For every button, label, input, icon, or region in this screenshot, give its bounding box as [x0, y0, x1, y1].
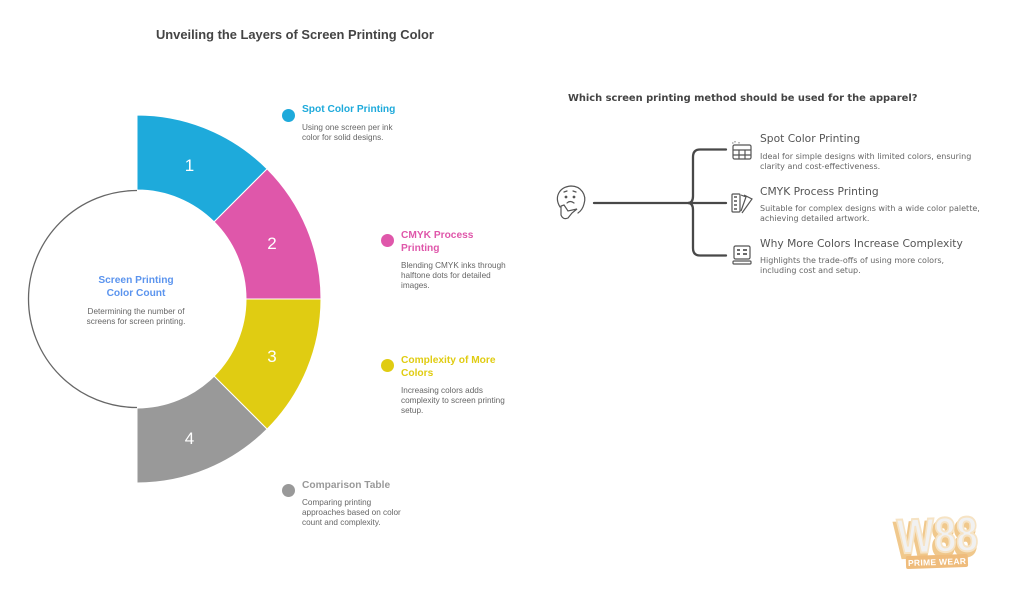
center text: Screen Printing [98, 275, 174, 286]
item: complexity [381, 355, 505, 415]
item: spot color: color for solid designs. [302, 132, 383, 142]
option: CMYK: CMYK Process Printing [760, 185, 879, 198]
title: Unveiling the Layers of Screen Printing Color [156, 27, 434, 42]
item: spot color: Using one screen per ink [302, 122, 393, 132]
segment 4 [137, 376, 267, 483]
segment 4: 4 [185, 429, 194, 448]
item: comparison: Comparison Table [302, 480, 390, 490]
option: CMYK [760, 185, 980, 223]
center text: Color Count [107, 288, 165, 299]
item: comparison: Comparing printing [302, 498, 371, 507]
option: complexity: Highlights the trade-offs of using more colors, [760, 256, 944, 265]
item: spot color: Spot Color Printing [302, 104, 395, 114]
segment 3 [214, 299, 321, 429]
branching connector [594, 150, 726, 256]
option: spot color: Ideal for simple designs with limited colors, ensuring [760, 152, 971, 160]
option: spot color [760, 132, 971, 170]
center circle outline [28, 190, 137, 408]
item: comparison [282, 480, 401, 527]
segment 1: 1 [185, 156, 194, 175]
option: CMYK: Suitable for complex designs with a wide color palette, [760, 204, 980, 213]
item: CMYK: Blending CMYK inks through [401, 261, 506, 270]
decision tree [556, 141, 753, 265]
item: complexity: setup. [401, 406, 423, 415]
option: complexity: Why More Colors Increase Complexity [760, 237, 963, 250]
segment 1 [137, 115, 267, 222]
option: complexity: including cost and setup. [760, 266, 861, 275]
item: CMYK: Printing [401, 243, 439, 254]
item: comparison: approaches based on color [302, 508, 401, 517]
item: complexity: Complexity of More [401, 355, 496, 366]
option: complexity [760, 237, 963, 275]
option: spot color: clarity and cost-effectiveness. [760, 162, 880, 170]
logo: W88 Prime Wear: PRIME WEAR [908, 556, 966, 568]
item: CMYK: images. [401, 281, 430, 290]
segment 3: 3 [267, 347, 277, 366]
option: CMYK: achieving detailed artwork. [760, 214, 869, 223]
item: CMYK: halftone dots for detailed [401, 271, 491, 280]
option: spot color: Spot Color Printing [760, 132, 860, 145]
center text [86, 275, 185, 326]
icon: computer [733, 246, 751, 264]
item: complexity: complexity to screen printing [401, 396, 505, 405]
icon: thinking face [557, 186, 585, 219]
icon: swatches [732, 194, 752, 213]
icon: table [732, 141, 751, 159]
ring chart [28, 116, 320, 482]
center text: screens for screen printing. [87, 317, 185, 326]
question heading: Which screen printing method should be used for the apparel? [568, 93, 917, 104]
item: CMYK [381, 230, 506, 290]
item: CMYK: CMYK Process [401, 230, 473, 241]
item: complexity: Increasing colors adds [401, 386, 483, 395]
center text: Determining the number of [88, 307, 184, 316]
item: comparison: count and complexity. [302, 518, 381, 527]
segment 2 [214, 169, 321, 299]
item: complexity: Colors [401, 368, 433, 379]
item: spot color [282, 104, 395, 142]
segment 2: 2 [267, 234, 277, 253]
